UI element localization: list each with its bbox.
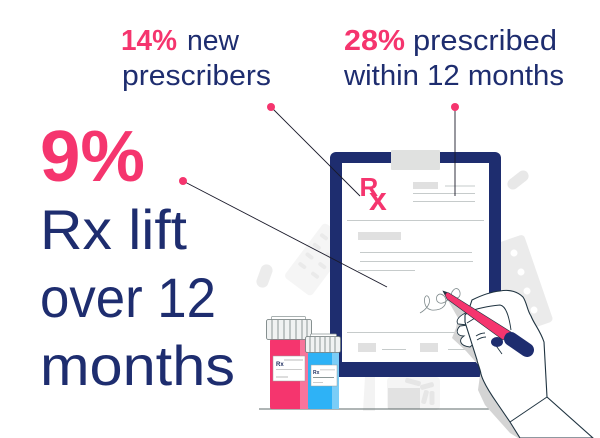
headline: Rx lift over 12 months: Rx lift xyxy=(40,198,187,261)
callout: 28% prescribed within 12 months: within 12 months xyxy=(343,60,564,92)
headline: Rx lift over 12 months: months xyxy=(40,334,235,397)
Rx symbol xyxy=(360,172,387,217)
headline: 9%: 9% xyxy=(40,117,145,197)
blue bottle label: Rx xyxy=(313,370,320,376)
background pills and blister packs xyxy=(255,168,554,411)
pill bottle: red xyxy=(266,316,312,409)
Rx symbol: R xyxy=(360,172,378,202)
callout: 28% prescribed within 12 months: 28% xyxy=(344,25,405,57)
fingers xyxy=(457,310,478,347)
red bottle label: Rx xyxy=(276,362,284,368)
leader: 14% new prescribers xyxy=(267,103,360,196)
callout: 14% new prescribers: new xyxy=(187,25,239,57)
hand xyxy=(457,290,593,438)
headline: Rx lift over 12 months: over 12 xyxy=(40,266,216,329)
form lines xyxy=(347,182,484,352)
callout: 14% new prescribers xyxy=(121,25,271,92)
pen xyxy=(443,291,527,350)
leader: 28% prescribed xyxy=(451,103,459,196)
clipboard xyxy=(330,150,501,377)
shelf line xyxy=(259,408,500,410)
Rx symbol: x xyxy=(369,181,387,217)
clipboard clip xyxy=(391,150,440,170)
knuckle lines xyxy=(465,305,511,354)
callout: 28% prescribed within 12 months: prescribed xyxy=(413,25,557,57)
headline: Rx lift over 12 months xyxy=(40,198,235,397)
signature xyxy=(420,289,460,313)
wrist line xyxy=(510,397,547,422)
pill bottle: blue xyxy=(306,334,340,409)
callout: 28% prescribed within 12 months xyxy=(343,25,564,92)
hand shadow xyxy=(446,297,530,438)
callout: 14% new prescribers: prescribers xyxy=(122,60,271,92)
leader: 9% Rx lift xyxy=(179,177,387,287)
callout: 14% new prescribers: 14% xyxy=(121,25,177,57)
